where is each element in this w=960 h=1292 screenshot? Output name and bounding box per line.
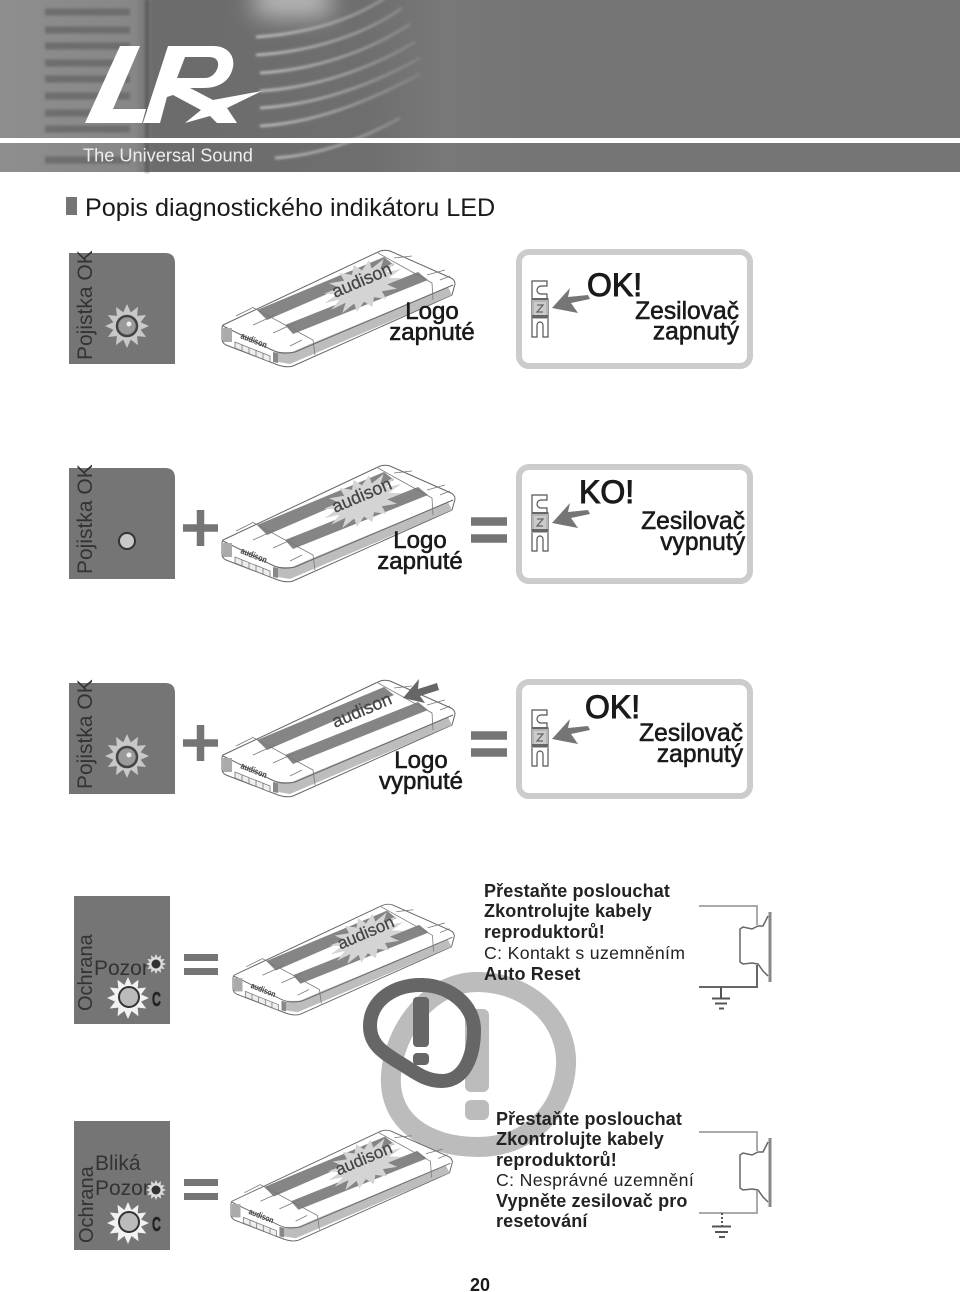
LED panel: Pozor (94, 957, 149, 980)
LED panel (69, 464, 175, 579)
instructions: C: Nesprávné uzemnění (496, 1170, 694, 1190)
caption (377, 527, 463, 575)
caption: Logo (405, 298, 459, 325)
amplifier logo on: audison (239, 331, 268, 350)
instructions: Zkontrolujte kabely (484, 901, 652, 921)
amplifier logo off: audison (239, 761, 268, 780)
instructions: Auto Reset (484, 964, 581, 984)
LED panel: Ochrana (76, 1165, 98, 1243)
speaker wiring (699, 1132, 770, 1237)
result box: vypnutý (660, 529, 746, 556)
instructions: Přestaňte poslouchat (496, 1109, 682, 1129)
amplifier logo on: audison (239, 546, 268, 565)
warning mark: large light (391, 982, 566, 1147)
amplifier: audison (249, 980, 278, 1000)
result box (519, 467, 750, 581)
equals sign (471, 522, 507, 538)
LED panel: Pojistka OK (74, 464, 97, 574)
plus sign (183, 510, 218, 546)
result box: Zesilovač (641, 508, 745, 535)
caption (379, 747, 463, 795)
amplifier (233, 902, 454, 1015)
instructions (484, 881, 685, 984)
row 2: fuse KO, logo on (69, 463, 750, 582)
result box: Zesilovač (639, 720, 743, 747)
row 3: fuse OK, logo off (69, 679, 750, 797)
heading: Popis diagnostického indikátoru LED (85, 194, 495, 222)
LED panel (69, 250, 175, 364)
row 4: protection, auto reset (74, 881, 770, 1081)
instructions: reproduktorů! (484, 922, 605, 942)
LED panel: Pojistka OK (74, 250, 97, 360)
LED panel: Ochrana (75, 933, 97, 1011)
amplifier logo on (222, 248, 455, 367)
LED panel: C (152, 988, 161, 1011)
instructions: C: Kontakt s uzemněním (484, 943, 685, 963)
instructions (496, 1109, 694, 1231)
row 1: fuse OK, logo on (69, 248, 750, 367)
LED panel: C (152, 1213, 161, 1236)
result box: OK! (587, 267, 642, 303)
LED panel (74, 896, 170, 1024)
amplifier: audison (334, 912, 397, 953)
caption: Logo (394, 747, 448, 774)
plus sign (183, 725, 218, 761)
amplifier: audison (332, 1138, 395, 1179)
result box (519, 252, 750, 366)
result box: OK! (585, 689, 640, 725)
tagline: The Universal Sound (83, 146, 253, 166)
row 5: protection, manual reset (74, 1109, 770, 1250)
caption: vypnuté (379, 768, 463, 795)
equals sign (184, 1182, 218, 1196)
speaker wiring (699, 906, 770, 1008)
caption: Logo (393, 527, 447, 554)
instructions: resetování (496, 1211, 588, 1231)
amplifier logo off (222, 680, 455, 797)
caption (389, 298, 475, 346)
amplifier (231, 1128, 452, 1241)
warning mark: dark (370, 985, 474, 1081)
equals sign (471, 736, 507, 752)
caption: zapnuté (389, 319, 475, 346)
instructions: Vypněte zesilovač pro (496, 1191, 688, 1211)
result box: Zesilovač (635, 298, 739, 325)
amplifier logo on: audison (329, 474, 395, 517)
LED panel (69, 679, 175, 794)
result box: zapnutý (653, 318, 740, 346)
amplifier logo on (222, 463, 455, 582)
arrow to logo (403, 679, 439, 703)
caption: zapnuté (377, 548, 463, 575)
result box: zapnutý (657, 741, 744, 768)
LED panel: Bliká (95, 1152, 141, 1175)
amplifier logo off: audison (329, 689, 395, 732)
logo: LRx (85, 46, 262, 123)
header banner (0, 0, 960, 172)
LED panel: Pozor (95, 1177, 150, 1200)
instructions: Přestaňte poslouchat (484, 881, 670, 901)
LED panel: Pojistka OK (74, 679, 97, 789)
instructions: reproduktorů! (496, 1150, 617, 1170)
amplifier logo on: audison (329, 259, 395, 302)
result box: KO! (579, 474, 634, 510)
amplifier: audison (247, 1206, 276, 1226)
equals sign (184, 958, 218, 972)
LED panel (74, 1121, 170, 1250)
heading bullet (66, 197, 77, 215)
result box (519, 682, 750, 796)
instructions: Zkontrolujte kabely (496, 1129, 664, 1149)
